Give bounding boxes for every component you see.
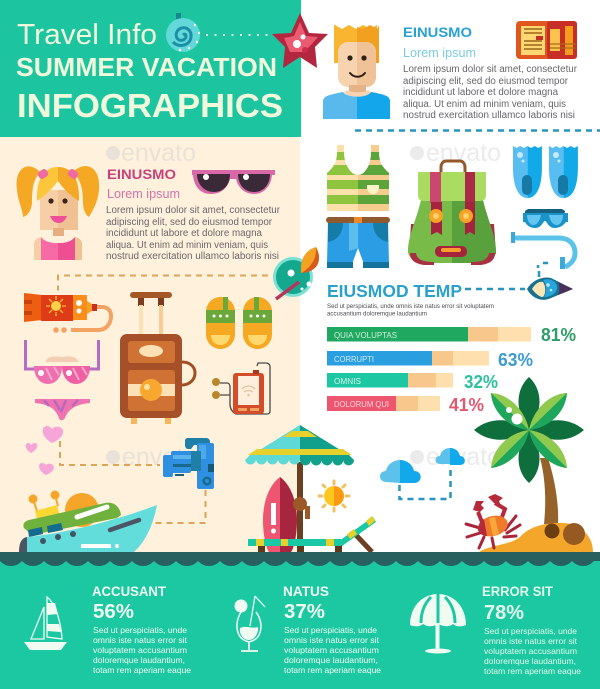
bar: quia voluptas: QUIA VOLUPTAS — [334, 330, 397, 340]
icon: sun — [319, 481, 349, 511]
dashed connector: hearts to camera — [60, 441, 160, 465]
bar: dolorum qui — [327, 395, 484, 415]
text block: right profile: adipiscing elit, sed do eiusmod tempor — [403, 76, 569, 87]
dashed connector: camera to boat — [148, 490, 206, 523]
panel text: accusant: voluptatem accusantium — [93, 645, 187, 655]
icon: diving mask — [523, 209, 568, 228]
watermarks: envato — [121, 139, 196, 167]
icon: green backpack — [408, 161, 496, 265]
panel text: error sit: totam rem aperiam eaque — [484, 666, 581, 676]
panel text: natus: NATUS — [283, 584, 329, 599]
panel text: accusant: 56% — [93, 601, 134, 623]
icon: yacht — [19, 490, 157, 552]
icon: surfboard — [263, 477, 297, 552]
icon: crab — [466, 494, 520, 548]
icon: sunglasses — [192, 170, 275, 194]
watermarks: envato — [122, 443, 197, 471]
icon: beach umbrella — [245, 425, 354, 552]
watermarks: envato — [426, 139, 501, 167]
heading: left profile: EINUSMO — [107, 166, 176, 182]
panel text: error sit: omnis iste natus error sit — [484, 636, 578, 646]
text block: left profile: nostrud exercitation ullamco laboris nisi — [106, 251, 279, 262]
icon: photo camera — [163, 438, 214, 489]
icon: striped tank top — [326, 145, 390, 211]
icon: starfish — [272, 13, 328, 68]
panel text: natus: doloremque laudantium, — [284, 655, 378, 665]
icon: boy portrait — [323, 25, 390, 119]
dashed connector — [355, 129, 600, 132]
text block: right profile: Lorem ipsum dolor sit amet, consectetur — [403, 64, 578, 75]
section heading: eiusmod temp — [327, 281, 494, 318]
icon: denim shorts — [326, 217, 390, 268]
dashed connector: snorkel to shell — [538, 263, 548, 277]
panel text: error sit: doloremque laudantium, — [484, 656, 576, 666]
bar: omnis — [327, 372, 498, 392]
panel text: accusant: Sed ut perspiciatis, unde — [93, 625, 187, 635]
panel text: error sit — [482, 584, 581, 676]
icon: slippers — [206, 297, 272, 349]
icon: cocktail — [234, 596, 265, 651]
heading: right profile: Lorem ipsum — [403, 46, 476, 60]
bar: corrupti: CORRUPTI — [334, 354, 374, 364]
icon: snorkel — [513, 232, 575, 269]
text block: left profile — [106, 205, 281, 262]
dotted line — [206, 34, 271, 36]
panel text: error sit: 78% — [484, 602, 524, 624]
bar: corrupti: 63% — [498, 350, 533, 370]
panel text: natus: totam rem aperiam eaque — [284, 665, 381, 675]
heading: right profile: EINUSMO — [403, 24, 472, 40]
panel text: accusant — [92, 584, 191, 675]
icon: suitcase — [120, 292, 195, 424]
text block: right profile — [403, 64, 578, 121]
panel text: error sit: Sed ut perspiciatis, unde — [484, 626, 577, 636]
section heading: eiusmod temp: accusantium doloremque laudantium — [327, 312, 427, 318]
dashed connector: heading to shell — [465, 288, 525, 290]
text block: left profile: Lorem ipsum dolor sit amet, consectetur — [106, 205, 281, 216]
watermarks — [106, 139, 501, 471]
icon: sailboat — [24, 597, 67, 650]
bar chart — [327, 325, 576, 415]
panel text: accusant: omnis iste natus error sit — [93, 635, 188, 645]
title: INFOGRAPHICS — [17, 87, 283, 124]
band: dark scalloped water line — [0, 552, 600, 689]
heading: left profile: Lorem ipsum — [107, 187, 180, 201]
title: Travel Info — [17, 19, 157, 51]
icon: sun lounger — [258, 533, 372, 553]
text block: right profile: nostrud exercitation ullamco laboris nisi — [403, 110, 575, 121]
icon: bikini bottom — [35, 399, 90, 420]
panel text: natus: 37% — [284, 601, 325, 623]
watermarks: envato — [426, 443, 501, 471]
panel text: error sit: ERROR SIT — [482, 584, 554, 599]
text block: right profile: incididunt ut labore et dolore magna — [403, 87, 559, 98]
dashed connector: top left — [58, 276, 279, 290]
panel text: natus — [283, 584, 381, 675]
panel text: accusant: doloremque laudantium, — [93, 655, 185, 665]
panel text: natus: voluptatem accusantium — [284, 645, 379, 655]
bar: corrupti — [327, 350, 533, 370]
icon: palm tree — [474, 377, 584, 524]
icon: drink pin — [273, 247, 319, 299]
icon: sand island — [479, 523, 593, 552]
icon: tablet with earphones — [212, 363, 270, 414]
icon: lounger seat and knob — [248, 497, 376, 546]
icons: hearts — [26, 426, 63, 475]
panel text: accusant: totam rem aperiam eaque — [93, 665, 191, 675]
icon: parasol — [410, 594, 466, 654]
icon: conch shell — [527, 278, 573, 300]
icon: clouds — [380, 448, 465, 483]
panel text: natus: Sed ut perspiciatis, unde — [284, 625, 377, 635]
panel text: accusant: ACCUSANT — [92, 584, 167, 599]
icon: sunscreen tube — [24, 293, 111, 333]
icon: bikini top — [26, 340, 98, 384]
title — [16, 19, 283, 124]
text block: left profile: incididunt ut labore et dolore magna — [106, 228, 263, 239]
icon: girl portrait — [17, 166, 99, 260]
heading: right profile — [403, 24, 476, 60]
text block: right profile: aliqua. Ut enim ad minim veniam, quis — [403, 99, 566, 110]
heading: left profile — [107, 166, 180, 201]
icon: swim fins — [513, 146, 578, 198]
dashed connector: clouds — [400, 465, 450, 499]
text block: left profile: adipiscing elit, sed do eiusmod tempor — [106, 217, 273, 228]
bar: dolorum qui: 41% — [449, 395, 484, 415]
bar: omnis: 32% — [464, 372, 498, 392]
icon: spiral shell — [166, 13, 200, 52]
icon: travel ticket — [516, 21, 577, 59]
section heading: eiusmod temp: Sed ut perspiciatis, unde omnis iste natus error sit voluptatem — [327, 304, 494, 310]
bar: dolorum qui: DOLORUM QUI — [334, 399, 389, 409]
bar: quia voluptas: 81% — [541, 325, 576, 345]
panel text: error sit: voluptatem accusantium — [484, 646, 577, 656]
bar: omnis: OMNIS — [334, 376, 361, 386]
section heading: eiusmod temp: EIUSMOD TEMP — [327, 281, 462, 301]
panel text: natus: omnis iste natus error sit — [284, 635, 380, 645]
title: SUMMER VACATION — [16, 52, 277, 82]
text block: left profile: aliqua. Ut enim ad minim veniam, quis — [106, 240, 268, 251]
bar: quia voluptas — [327, 325, 576, 345]
